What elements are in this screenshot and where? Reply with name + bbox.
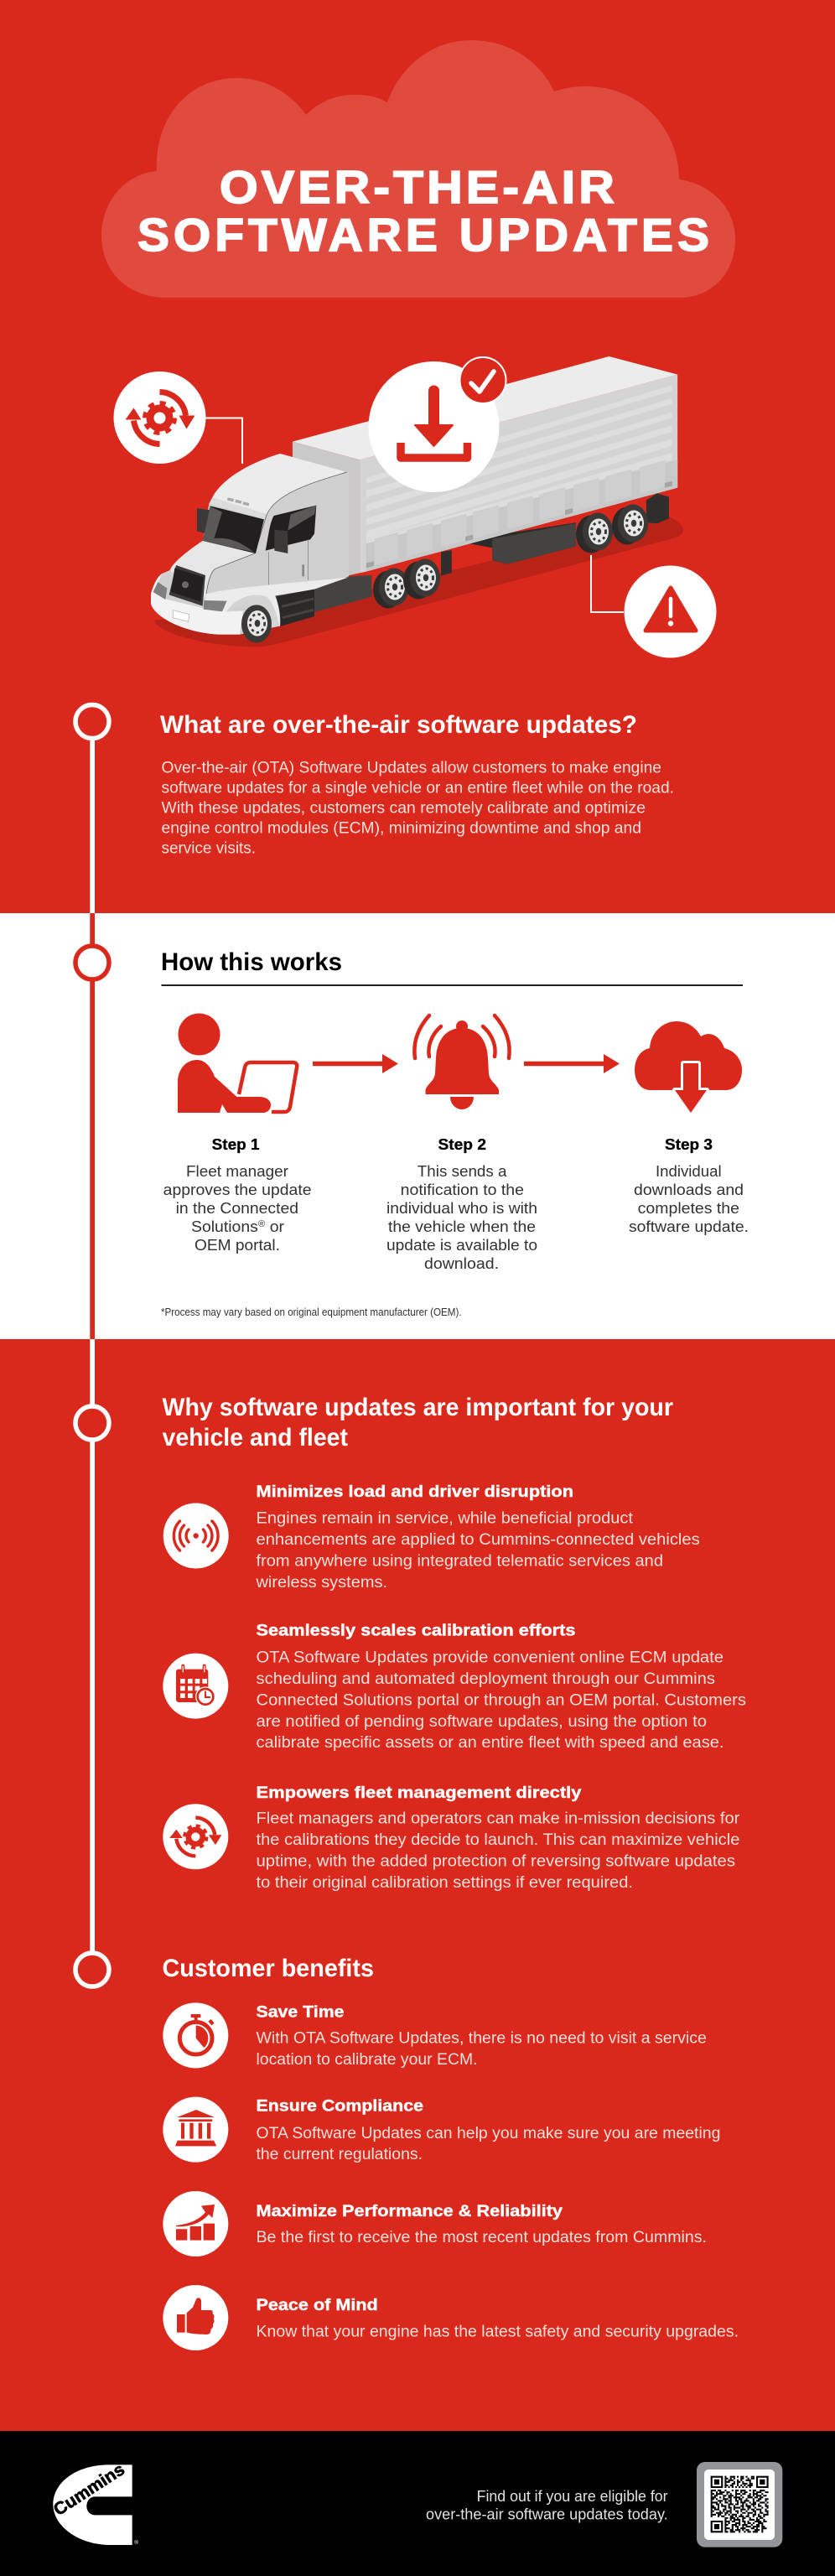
text block: OTA definition: software updates for a single vehicle or an entire fleet while on the road.: [161, 780, 674, 797]
logo: Cummins: ®: [134, 2539, 138, 2546]
truck illustration: [151, 356, 683, 647]
timeline marker 4: [75, 1953, 109, 1987]
item: seamlessly scales calibration: scheduling and automated deployment through our Cummins: [257, 1670, 715, 1688]
item: minimizes load and driver disruption: wireless systems.: [255, 1574, 387, 1592]
item: minimizes load and driver disruption: Engines remain in service, while beneficial product: [257, 1510, 634, 1528]
item: maximize performance: [257, 2203, 707, 2246]
logo: Cummins: Cummins: [50, 2459, 128, 2520]
step 1 text: or: [265, 1218, 284, 1235]
item: seamlessly scales calibration: calibrate specific assets or an entire fleet with speed and ease.: [257, 1734, 724, 1752]
step 1 text: ®: [258, 1219, 265, 1229]
icon: gear update callout: [114, 371, 206, 464]
icon: courthouse: [163, 2097, 228, 2163]
step 2 text: [386, 1135, 537, 1272]
heading: why software updates are important: vehicle and fleet: [163, 1424, 348, 1452]
background: white how-it-works section: [0, 913, 835, 1339]
icon: wireless signal: [163, 1503, 229, 1568]
step 1 text: approves the update: [163, 1181, 312, 1198]
step 3 text: software update.: [629, 1218, 749, 1235]
step 3 text: downloads and: [634, 1181, 744, 1198]
footer bar: [0, 2431, 835, 2576]
timeline marker 3: [75, 1406, 109, 1440]
step 1 text: OEM portal.: [194, 1236, 280, 1254]
item: maximize performance: Maximize Performance & Reliability: [257, 2203, 563, 2220]
footer call to action: Find out if you are eligible for: [477, 2488, 668, 2505]
rear tractor wheels: [373, 558, 440, 609]
step 2 text: the vehicle when the: [388, 1218, 536, 1235]
heading: why software updates are important: [163, 1394, 673, 1452]
item: save time: location to calibrate your ECM.: [257, 2051, 478, 2069]
item: save time: Save Time: [257, 2004, 344, 2022]
truck cab: [151, 454, 371, 643]
icon: gear with rotating arrows: [163, 1804, 228, 1869]
truck ground shadow: [154, 517, 683, 647]
timeline marker 1: [75, 704, 109, 738]
arrow: step 2 to step 3: [524, 1054, 620, 1073]
step 3 text: Individual: [656, 1162, 722, 1180]
step 3 text: Step 3: [665, 1135, 713, 1153]
item: ensure compliance: [257, 2098, 720, 2163]
icon: cloud download: [635, 1021, 742, 1113]
icon: calendar and clock: [163, 1654, 228, 1719]
item: empowers fleet management: Fleet managers and operators can make in-mission decisions for: [257, 1810, 740, 1828]
icon: download callout: [369, 361, 500, 492]
background: top red section: [0, 0, 835, 913]
trailer and undercarriage: [293, 356, 677, 576]
item: seamlessly scales calibration: Connected Solutions portal or through an OEM portal. Customers: [257, 1692, 746, 1710]
icon: warning callout: [624, 565, 716, 657]
footnote: *Process may vary based on original equipment manufacturer (OEM).: [161, 1306, 462, 1318]
item: empowers fleet management: to their original calibration settings if ever required.: [257, 1874, 633, 1892]
step 2 text: Step 2: [438, 1135, 486, 1153]
step 2 text: This sends a: [418, 1162, 507, 1180]
item: ensure compliance: OTA Software Updates can help you make sure you are meeting: [257, 2125, 720, 2142]
item: minimizes load and driver disruption: from anywhere using integrated telematic services and: [257, 1553, 663, 1570]
item: peace of mind: Know that your engine has the latest safety and security upgrades.: [257, 2324, 739, 2341]
item: peace of mind: [257, 2297, 739, 2341]
step 1 text: Solutions: [191, 1218, 255, 1235]
item: seamlessly scales calibration: are notified of pending software updates, using the option to: [257, 1713, 707, 1731]
text block: OTA definition: Over-the-air (OTA) Software Updates allow customers to make engine: [161, 760, 661, 777]
step 2 text: notification to the: [401, 1181, 524, 1198]
timeline spine: [90, 738, 95, 1951]
item: maximize performance: Be the first to receive the most recent updates from Cummins.: [257, 2229, 707, 2246]
heading: customer benefits: Customer benefits: [163, 1955, 374, 1982]
step 1 text: [163, 1135, 312, 1254]
item: empowers fleet management: uptime, with the added protection of reversing software updates: [257, 1852, 735, 1870]
item: empowers fleet management: the calibrations they decide to launch. This can maximize vehicle: [257, 1831, 739, 1849]
item: minimizes load and driver disruption: enhancements are applied to Cummins-connected vehicles: [257, 1531, 700, 1549]
title: OVER-THE-AIR: [220, 161, 618, 213]
heading: what are OTA updates: What are over-the-air software updates?: [160, 711, 637, 739]
heading: how this works: How this works: [161, 948, 342, 976]
title cloud: [101, 40, 735, 298]
heading rule: [161, 984, 743, 986]
step 2 text: update is available to: [386, 1236, 537, 1254]
footer call to action: [426, 2488, 668, 2523]
icon: notification bell: [414, 1015, 510, 1109]
connector: gear to cab: [205, 418, 242, 464]
step 2 text: download.: [424, 1254, 499, 1272]
icon: growth chart: [163, 2191, 228, 2257]
step 2 text: individual who is with: [386, 1199, 537, 1217]
icon: check badge: [459, 357, 506, 403]
step 1 text: in the Connected: [176, 1199, 298, 1217]
step 3 text: completes the: [638, 1199, 739, 1217]
icon: thumbs up: [163, 2285, 228, 2350]
text block: OTA definition: engine control modules (ECM), minimizing downtime and shop and: [161, 820, 641, 838]
footer call to action: over-the-air software updates today.: [426, 2506, 668, 2523]
title: SOFTWARE UPDATES: [137, 209, 713, 261]
icon: stopwatch: [163, 2002, 228, 2068]
item: empowers fleet management: Empowers fleet management directly: [257, 1784, 582, 1802]
item: save time: With OTA Software Updates, there is no need to visit a service: [257, 2030, 707, 2048]
step 3 text: [629, 1135, 749, 1235]
text block: OTA definition: service visits.: [161, 840, 256, 858]
title: [137, 161, 713, 261]
text block: OTA definition: [161, 760, 674, 858]
text block: OTA definition: With these updates, customers can remotely calibrate and optimize: [161, 800, 646, 818]
connector: warning to trailer: [591, 555, 624, 612]
heading: why software updates are important: Why software updates are important for your: [163, 1394, 673, 1421]
item: save time: [257, 2004, 707, 2069]
icon: fleet manager with laptop: [178, 1013, 297, 1113]
item: minimizes load and driver disruption: [255, 1483, 700, 1592]
item: seamlessly scales calibration: OTA Software Updates provide convenient online ECM update: [257, 1649, 723, 1666]
item: seamlessly scales calibration: Seamlessly scales calibration efforts: [257, 1623, 575, 1640]
timeline marker 2: [75, 946, 109, 979]
rear trailer wheels: [576, 505, 648, 553]
item: empowers fleet management: [257, 1784, 740, 1892]
step 1 text: Fleet manager: [186, 1162, 288, 1180]
item: ensure compliance: the current regulations.: [257, 2146, 423, 2163]
item: ensure compliance: Ensure Compliance: [257, 2098, 423, 2116]
QR code: [697, 2462, 782, 2547]
item: minimizes load and driver disruption: Minimizes load and driver disruption: [257, 1483, 573, 1501]
item: seamlessly scales calibration: [257, 1623, 746, 1752]
item: peace of mind: Peace of Mind: [257, 2297, 378, 2314]
background: lower red section: [0, 1339, 835, 2431]
arrow: step 1 to step 2: [313, 1054, 398, 1073]
step 1 text: Step 1: [212, 1135, 260, 1153]
logo: Cummins: [50, 2459, 138, 2546]
